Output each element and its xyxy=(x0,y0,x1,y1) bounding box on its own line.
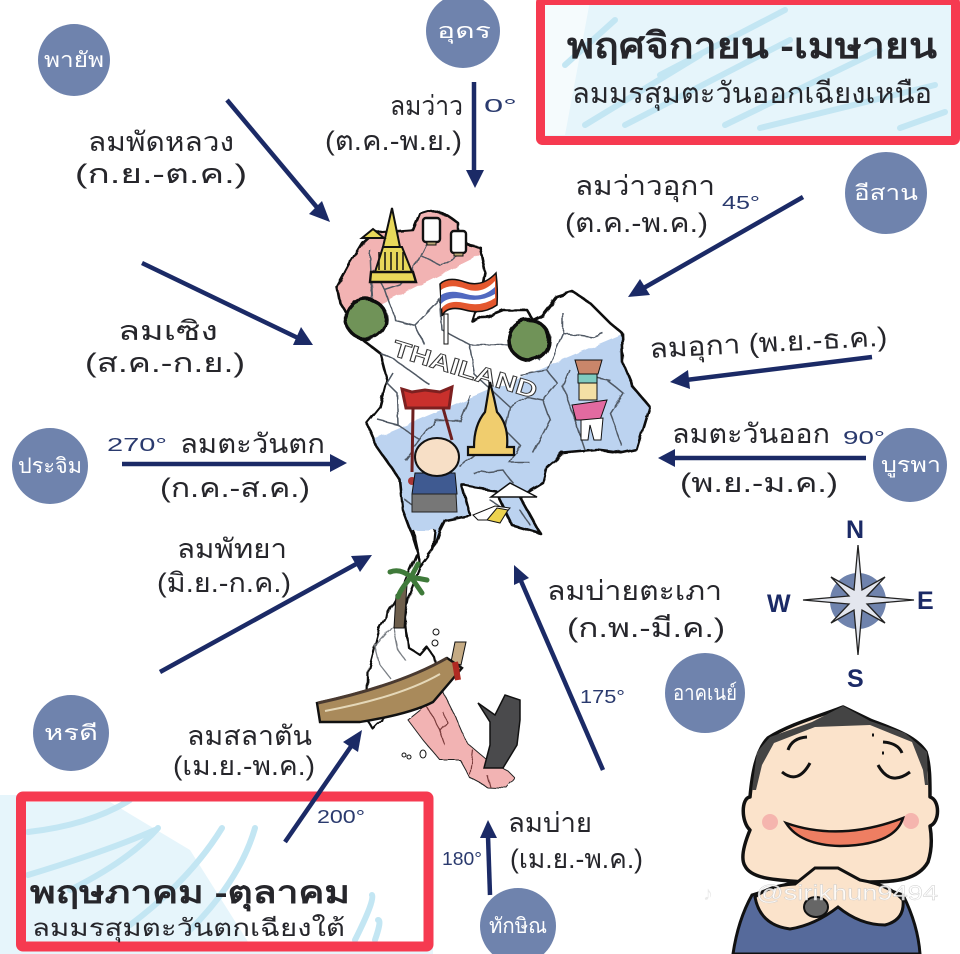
THAILAND label: THAILAND xyxy=(390,335,541,404)
badge: west xyxy=(12,428,88,504)
label: salatan: (เม.ย.-พ.ค.) xyxy=(173,751,315,781)
tree left xyxy=(346,299,386,339)
label: bai tapao: 175° xyxy=(580,687,625,707)
badge: southwest: หรดี xyxy=(44,722,98,745)
watermark: ♪ xyxy=(703,883,713,905)
panel: northeast monsoon title xyxy=(540,0,956,140)
shadow puppet xyxy=(478,695,520,768)
label: bai tapao: ลมบ่ายตะเภา xyxy=(547,576,722,606)
peninsula provinces xyxy=(375,625,405,680)
label: bai: 180° xyxy=(442,849,482,869)
man at swing xyxy=(408,438,459,512)
hair xyxy=(752,706,928,790)
badge: east: บูรพา xyxy=(881,454,941,478)
arrow: south-southeast wind xyxy=(514,565,603,770)
arrow: northwest wind xyxy=(227,100,330,222)
label: tawan ok xyxy=(672,419,885,498)
star xyxy=(803,545,914,655)
label: wao: 0° xyxy=(484,96,517,116)
badge: southeast xyxy=(665,653,745,733)
label: phatthaya: (มิ.ย.-ก.ค.) xyxy=(157,568,291,598)
wind labels xyxy=(75,91,888,874)
lantern one xyxy=(423,218,440,245)
label: tawan tok: ลมตะวันตก xyxy=(180,429,325,459)
badge: southwest xyxy=(33,695,109,771)
badge: north: อุดร xyxy=(437,20,491,44)
north: N xyxy=(846,516,864,544)
badge: northwest xyxy=(38,24,110,96)
title text: พฤษภาคม -ตุลาคม xyxy=(30,875,350,912)
islands xyxy=(402,629,439,759)
long-tail boat xyxy=(317,642,466,722)
label: tawan ok: ลมตะวันออก xyxy=(672,419,830,449)
main outline xyxy=(337,210,650,567)
lantern two xyxy=(451,231,466,256)
compass rose xyxy=(767,516,934,693)
east: E xyxy=(917,587,934,615)
temple xyxy=(362,208,416,282)
label: wao uka xyxy=(565,171,760,238)
arrow: west-southwest wind xyxy=(160,555,372,672)
label: bai xyxy=(442,808,643,874)
dancer figure xyxy=(572,360,607,440)
badge: northeast xyxy=(845,152,927,234)
label: phatthaya: ลมพัทยา xyxy=(177,534,287,564)
south: S xyxy=(847,665,864,693)
arrow: north-northeast wind xyxy=(628,197,803,297)
label: wao: (ต.ค.-พ.ย.) xyxy=(325,126,462,156)
body xyxy=(733,880,920,954)
Thai flag xyxy=(440,273,497,344)
badge: west: ประจิม xyxy=(18,455,82,478)
southern province lines xyxy=(427,707,490,787)
forehead dots xyxy=(872,735,884,753)
label: bai tapao: (ก.พ.-มี.ค.) xyxy=(567,613,725,643)
arrow: north wind xyxy=(466,82,484,188)
arrow: west wind xyxy=(122,454,347,472)
west: W xyxy=(767,590,791,618)
subtitle text: ลมมรสุมตะวันตกเฉียงใต้ xyxy=(32,914,345,943)
label: tawan ok: (พ.ย.-ม.ค.) xyxy=(680,468,838,498)
wind arrows xyxy=(122,82,872,895)
peninsula xyxy=(367,530,443,729)
label: soeng xyxy=(85,316,245,378)
province borders xyxy=(370,235,623,525)
label: wao uka: (ต.ค.-พ.ค.) xyxy=(565,208,708,238)
arrow: south wind xyxy=(480,820,497,895)
label: soeng: ลมเซิง xyxy=(118,316,218,346)
arrow: south-southwest wind xyxy=(285,730,362,842)
badge: northwest: พายัพ xyxy=(44,49,104,72)
label: wao uka: ลมว่าวอุกา xyxy=(575,171,715,203)
label: soeng: (ส.ค.-ก.ย.) xyxy=(85,348,245,378)
label: phatthaya xyxy=(157,534,291,598)
badge: south xyxy=(480,888,556,954)
label: phat luang xyxy=(75,127,247,189)
badge: north xyxy=(426,0,500,68)
badge: southeast: อาคเนย์ xyxy=(673,681,737,705)
subtitle text: ลมมรสุมตะวันออกเฉียงเหนือ xyxy=(572,78,932,111)
head xyxy=(743,707,938,882)
panel: southwest monsoon title xyxy=(0,795,433,954)
book and umbrella xyxy=(473,483,537,523)
label: bai: ลมบ่าย xyxy=(508,808,592,838)
golden stupa xyxy=(468,382,514,455)
label: salatan: 200° xyxy=(317,807,365,827)
map base drawn with hand wobble xyxy=(330,200,670,788)
eyebrows and eyes xyxy=(782,737,910,778)
label: uka: ลมอุกา (พ.ย.-ธ.ค.) xyxy=(649,322,888,366)
cartoon man praying xyxy=(703,706,938,954)
watermark text: @sirikhun9494 xyxy=(756,882,938,905)
label: wao uka: 45° xyxy=(722,193,760,213)
colour bands xyxy=(338,212,649,540)
label: phat luang: (ก.ย.-ต.ค.) xyxy=(75,159,247,189)
badge: south: ทักษิณ xyxy=(489,915,547,938)
southern provinces xyxy=(408,692,515,788)
label: tawan ok: 90° xyxy=(843,428,885,448)
label: salatan xyxy=(173,721,365,827)
arrow: east-northeast wind xyxy=(670,357,872,389)
title text: พฤศจิกายน -เมษายน xyxy=(567,25,937,66)
label: bai tapao xyxy=(547,576,725,707)
label: tawan tok: 270° xyxy=(107,435,167,455)
red giant swing xyxy=(402,387,452,472)
mouth xyxy=(786,818,903,846)
cheeks xyxy=(762,813,919,830)
arrow: west-northwest wind xyxy=(142,263,313,345)
tree right xyxy=(509,320,549,360)
label: tawan tok: (ก.ค.-ส.ค.) xyxy=(160,473,310,503)
badge: east xyxy=(873,428,947,502)
label: phat luang: ลมพัดหลวง xyxy=(88,127,234,157)
arrow: east wind xyxy=(658,449,866,467)
badge: northeast: อีสาน xyxy=(854,182,918,205)
label: bai: (เม.ย.-พ.ค.) xyxy=(510,844,643,874)
thumb xyxy=(804,897,828,917)
map of Thailand xyxy=(317,200,670,788)
label: tawan tok xyxy=(107,429,325,503)
label: salatan: ลมสลาตัน xyxy=(187,721,312,751)
label: wao: ลมว่าว xyxy=(390,91,463,121)
label: wao xyxy=(325,91,517,156)
hands xyxy=(755,868,903,929)
palm tree xyxy=(390,564,427,628)
